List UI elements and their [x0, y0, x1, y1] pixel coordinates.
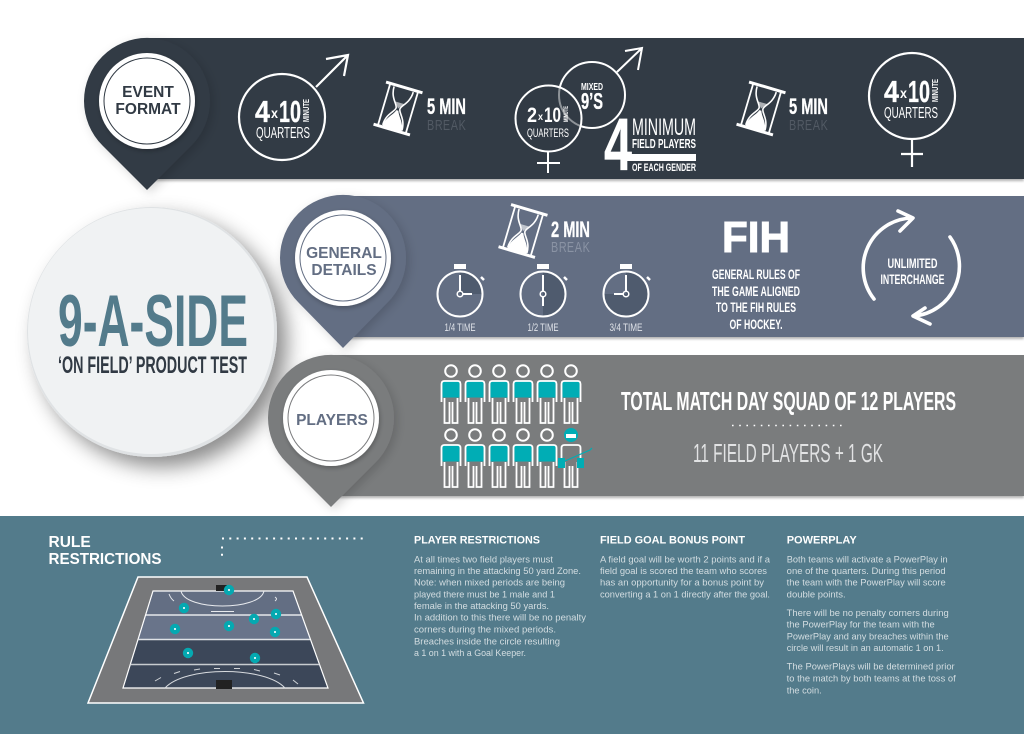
- general rules text: TO THE FIH RULES: [716, 299, 796, 315]
- hourglass: second 5 min break: BREAK: [789, 116, 828, 133]
- pin: event format: EVENT: [122, 84, 174, 101]
- text block: powerplay: POWERPLAY: [787, 534, 857, 546]
- pin: event format: FORMAT: [115, 101, 181, 118]
- heading: rule restrictions: RESTRICTIONS: [48, 551, 162, 568]
- text block: player restrictions: At all times two field players must: [414, 554, 553, 564]
- text block: field goal bonus point: A field goal will be worth 2 points and if a: [600, 554, 771, 564]
- male 4x10 quarters icon: x: [271, 105, 278, 121]
- female 4x10 quarters icon: [869, 53, 955, 167]
- FIH logo: FIH: [722, 213, 790, 262]
- female 2x10 quarters icon: [516, 86, 582, 173]
- unlimited interchange cycle icon: [863, 211, 959, 324]
- text block: powerplay: There will be no penalty corners during: [787, 608, 949, 618]
- stopwatch: 1/2 time: [520, 264, 567, 334]
- text block: player restrictions: remaining in the attacking 50 yard Zone.: [414, 566, 581, 576]
- player markers on pitch: [170, 585, 281, 663]
- text block: player restrictions: corners during the mixed periods.: [414, 625, 556, 635]
- heading: rule restrictions: [48, 534, 162, 568]
- hourglass: second 5 min break: [737, 82, 828, 135]
- female 2x10 quarters icon: x: [538, 112, 543, 123]
- minimum 4 field players of each gender: 4: [604, 103, 632, 186]
- text block: powerplay: to the match by both teams at the toss of: [787, 673, 956, 683]
- stopwatch: 1/2 time: 1/2 TIME: [528, 322, 558, 334]
- general rules text: OF HOCKEY.: [730, 316, 782, 332]
- mixed 9s icon: MIXED: [581, 82, 603, 93]
- text block: powerplay: PowerPlay and any breaches within the: [787, 631, 949, 641]
- text block: field goal bonus point: field goal is scored the team who scores: [600, 566, 767, 576]
- female 2x10 quarters icon: MINUTE: [564, 106, 570, 122]
- text block: field goal bonus point: [600, 534, 771, 599]
- text block: player restrictions: played there must be 1 male and 1: [414, 589, 555, 599]
- text block: powerplay: Both teams will activate a PowerPlay in: [787, 554, 948, 564]
- mixed 9s icon: 9’S: [581, 88, 603, 114]
- hourglass: 5 min break: 5 MIN: [427, 94, 466, 119]
- text block: powerplay: [787, 534, 956, 695]
- female 2x10 quarters icon: QUARTERS: [527, 126, 569, 140]
- stopwatch: 1/4 time: [438, 264, 484, 334]
- text block: player restrictions: [414, 534, 586, 658]
- pin: general details: DETAILS: [311, 262, 377, 279]
- female 4x10 quarters icon: QUARTERS: [884, 105, 938, 122]
- general rules text: GENERAL RULES OF: [712, 266, 800, 282]
- general rules text: THE GAME ALIGNED: [712, 283, 800, 299]
- male 4x10 quarters icon: MINUTE: [302, 99, 311, 122]
- text block: player restrictions: Breaches inside the circle resulting: [414, 637, 560, 647]
- subtitle: on field product test: ‘ON FIELD’ PRODUCT TEST: [58, 352, 247, 379]
- text block: powerplay: the team with the PowerPlay will score: [787, 578, 946, 588]
- text block: field goal bonus point: FIELD GOAL BONUS POINT: [600, 534, 745, 546]
- text block: player restrictions: In addition to this there will be no penalty: [414, 613, 586, 623]
- band: players: [331, 355, 1024, 496]
- main title circle: [27, 207, 277, 457]
- male 4x10 quarters icon: QUARTERS: [256, 125, 310, 142]
- player icons: squad of twelve: [442, 365, 592, 487]
- pin: players: [268, 355, 394, 507]
- heading: rule restrictions: RULE: [48, 534, 91, 551]
- female 2x10 quarters icon: 2: [527, 104, 537, 127]
- unlimited interchange cycle icon: INTERCHANGE: [880, 271, 944, 287]
- stopwatch: 3/4 time: [604, 264, 650, 334]
- text block: field goal bonus point: converting a 1 on 1 directly after the goal.: [600, 589, 770, 599]
- text block: powerplay: the coin.: [787, 685, 822, 695]
- text block: player restrictions: PLAYER RESTRICTIONS: [414, 534, 540, 546]
- stopwatch: 1/4 time: 1/4 TIME: [444, 322, 476, 334]
- goalkeeper icon: [558, 428, 592, 487]
- minimum 4 field players of each gender: OF EACH GENDER: [632, 162, 696, 174]
- minimum 4 field players of each gender: MINIMUM: [632, 114, 696, 141]
- pin: event format: [84, 38, 210, 190]
- pin: players: PLAYERS: [296, 412, 368, 429]
- pin: general details: [280, 195, 406, 348]
- unlimited interchange cycle icon: UNLIMITED: [888, 255, 938, 271]
- hourglass: second 5 min break: 5 MIN: [789, 94, 828, 119]
- female 4x10 quarters icon: 10: [908, 74, 930, 109]
- band: general details: [343, 196, 1024, 337]
- female 4x10 quarters icon: 4: [884, 74, 900, 109]
- band: event format: [147, 38, 1024, 179]
- minimum 4 field players of each gender: [604, 103, 696, 186]
- text block: player restrictions: a 1 on 1 with a Goal Keeper.: [414, 648, 526, 658]
- hourglass: 2 min break: 2 MIN: [551, 217, 590, 242]
- female 2x10 quarters icon: 10: [544, 104, 561, 127]
- text block: player restrictions: Note: when mixed periods are being: [414, 578, 565, 588]
- hourglass: 2 min break: [499, 205, 590, 257]
- female 4x10 quarters icon: MINUTE: [931, 79, 940, 102]
- minimum 4 field players of each gender: FIELD PLAYERS: [632, 136, 696, 151]
- text block: powerplay: circle will result in an automatic 1 on 1.: [787, 643, 944, 653]
- text block: field goal bonus point: has an opportunity for a bonus point by: [600, 578, 764, 588]
- text block: player restrictions: female in the attacking 50 yards.: [414, 601, 549, 611]
- stopwatch: 3/4 time: 3/4 TIME: [610, 322, 642, 334]
- title: 9-A-SIDE: 9-A-SIDE: [58, 281, 248, 362]
- male 4x10 quarters icon: [239, 55, 348, 160]
- pin: general details: GENERAL: [306, 245, 382, 262]
- text block: powerplay: double points.: [787, 589, 846, 599]
- mixed 9s icon: [559, 48, 642, 128]
- hourglass: 5 min break: BREAK: [427, 116, 466, 133]
- female 4x10 quarters icon: x: [900, 85, 907, 101]
- hourglass: 5 min break: [374, 82, 466, 135]
- squad breakdown: 11 FIELD PLAYERS + 1 GK: [693, 438, 883, 468]
- text block: powerplay: The PowerPlays will be determined prior: [787, 662, 955, 672]
- bottom panel: rule restrictions background: [0, 516, 1024, 734]
- pitch diagram: [88, 577, 364, 703]
- text block: powerplay: the PowerPlay for the team with the: [787, 620, 935, 630]
- text block: powerplay: one of the quarters. During this period: [787, 566, 946, 576]
- male 4x10 quarters icon: 4: [255, 94, 271, 129]
- general rules text: [712, 266, 800, 332]
- male 4x10 quarters icon: 10: [279, 94, 301, 129]
- hourglass: 2 min break: BREAK: [551, 238, 590, 255]
